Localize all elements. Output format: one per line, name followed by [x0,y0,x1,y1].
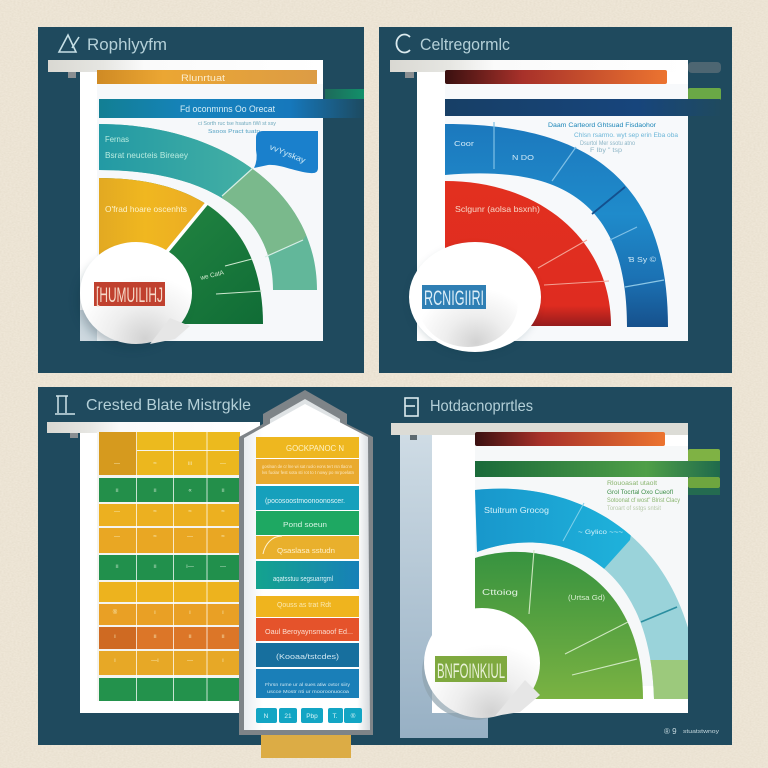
table cell marks: — [114,509,120,515]
strip: heading [256,437,359,458]
footer credit [664,727,720,736]
icon: building [55,396,75,414]
arc: green segment [475,552,643,699]
roof inner [270,399,340,424]
icon: letter E [405,398,418,416]
white sheet [47,422,260,713]
strip: green [256,511,359,535]
table cell marks: « [188,488,192,494]
green tab [688,88,721,100]
strip: red orange [256,618,359,641]
table cell marks: ≈ [221,509,225,515]
heading: panel one title: Rophlyyfm [87,35,167,54]
green segment details: (Urtsa Gd) [568,593,606,602]
strip: paragraph [256,459,359,484]
strip: paragraph: lvs fuolar fest sota sti rot to t nowy po mrpoelatn [262,470,354,475]
callout bubble: vvYyskay [268,143,307,165]
arc divider lines [222,168,303,257]
table cell marks: ıı [115,488,119,494]
band labels [484,505,623,536]
red header bar [475,432,665,446]
button row: Pbp [306,713,318,720]
strip: red orange: Oaul Beroyaynsmaoof Ed... [265,627,353,636]
blue band: Fd oconmnns Oo Orecat [180,104,275,114]
intro caption: Dsurtol Mer ssotu atno [580,140,635,147]
footer credit: stuatstwnoy [683,729,720,735]
intro caption [548,122,678,154]
table cell marks [113,461,226,664]
green tabs [688,449,720,495]
green ribbon tab [325,89,364,104]
green segment details [199,259,262,294]
green band [475,461,720,477]
card body [244,404,370,730]
strip: teal blue [256,561,359,589]
side column [400,434,488,738]
table cell marks: ≈ [153,509,157,515]
arc labels [105,134,189,160]
white disc with label [78,242,192,348]
intro caption: Rlouoasat utaolt [607,480,657,487]
blue label: RCNIGIIRI [424,287,484,310]
table cell marks: ı [189,610,191,616]
table cell marks: — [114,534,120,540]
arc divider lines [494,122,664,287]
band labels [454,139,657,264]
white sheet [390,60,688,341]
white disc with label [409,242,541,352]
intro caption: Daam Carteord Ghtsuad Fisdaohor [548,122,657,129]
table cell marks: ıı [188,634,192,640]
panel: bottom left table [47,396,260,713]
intro caption [607,480,681,512]
table cell marks: ıı [153,564,157,570]
strip: yellow with curve [256,536,359,559]
panel: lower dark background [38,387,732,745]
intro caption: Ssoos Pract tuatn [208,129,260,135]
table cell marks: ≈ [153,461,157,467]
strip: blue: (Kooaa/tstcdes) [276,652,340,661]
arc labels: Fernas [105,134,129,144]
table cell marks: — [114,461,120,467]
green segment details [482,550,637,675]
table cell marks: ı [222,610,224,616]
table cell marks: ı [114,634,116,640]
heading: panel three title: Crested Blate Mistrgkle [86,397,251,414]
arc gap line [165,203,207,254]
band labels: N DO [512,153,534,162]
footer credit: ® 9 [664,727,677,736]
table cell marks: ıı [221,634,225,640]
strip: green: Pond soeun [283,520,327,529]
table cell marks: ı [114,658,116,664]
callout bubble [254,131,318,173]
arc: red segment [445,178,615,328]
table cell marks: ıı [221,488,225,494]
table cell marks: — [220,564,226,570]
white disc with label [422,608,540,720]
intro caption: Toroart of sstgs sntsit [607,505,661,512]
green segment details: we CatA [199,269,225,282]
table cell marks: ıı [153,634,157,640]
table cell marks: ≈ [188,509,192,515]
orange header bar: Rlunrtuat [181,73,226,83]
table cell marks: ıı [115,564,119,570]
white sheet [48,60,323,341]
band labels: ~ Gylico ~~~ [578,529,623,536]
arc: outer blue band [445,120,670,330]
intro caption: ci Sorth ruc tse hsatun tWi st ssy [198,121,276,127]
red segment details [455,204,609,285]
table cell marks: — [220,461,226,467]
button row: N [264,713,269,720]
intro caption: Grol Tocrtal Oxo Cueofl [607,489,674,496]
table cell marks: ı [154,610,156,616]
orange header bar [97,70,317,84]
gold base tab [261,733,351,758]
table cell marks: ı [222,658,224,664]
strip: yellow: Qouss as trat Rdt [277,602,331,609]
band labels: Stuitrum Grocog [484,505,549,515]
arc labels: Bsrat neucteis Bireaey [105,150,189,160]
card outline [239,390,373,735]
strip: blue paragraph [256,669,359,698]
strip: blue paragraph: uscce Mostr nti ur mooroonuocoa [267,689,350,694]
table grid [97,432,240,701]
strip: yellow with curve: Qsaslasa sstudn [277,548,335,555]
strip: paragraph: goslnan de cr lne wi sat ruolo eons tert rsn tlacnn [262,464,352,469]
panel: bottom right chart [391,398,720,738]
panel: top right chart [379,27,732,373]
blue band [99,99,364,118]
table cell marks: ııı [187,461,193,467]
intro caption [198,121,276,135]
table cell marks: ı— [186,564,194,570]
strip: heading: GOCKPANOC N [286,444,344,453]
red segment details: Sclgunr (aolsa bsxnh) [455,204,540,214]
arc dividers [563,503,677,622]
button row [256,708,362,723]
heading: panel four title: Hotdacnoprrtles [430,398,533,415]
table cell marks: ® [113,609,118,616]
intro caption: Sotoonat cf wost" Blrist Clacy [607,497,681,504]
intro caption: Chlsn rsarmo. wyt sep erin Eba oba [574,132,678,139]
red label: [HUMUILIHJ [96,284,163,307]
band labels: Ɓ Sy © [628,255,657,264]
green label: BNFOINKIUL [437,660,505,683]
strip: teal [256,486,359,510]
arc: yellow segment [99,178,263,324]
arc: outer teal band [99,124,317,290]
green segment details: Cttoiog [482,587,518,597]
strip: yellow [256,596,359,617]
button row: 21 [284,713,292,720]
table cell marks: ≈ [221,534,225,540]
table cell marks: ≈ [153,534,157,540]
table cell marks: — [187,658,193,664]
white sheet [391,423,688,713]
arc: outer band [475,488,688,699]
table cell marks: — [187,534,193,540]
heading: panel two title: Celtregormlc [420,35,510,54]
band labels: Coor [454,139,475,148]
strip: blue paragraph: Fhrsn rume ur al sues atiw ovtor siiry [265,682,351,687]
table cell marks: ıı [153,488,157,494]
yellow segment label: O'frad hoare oscenhts [105,204,187,214]
strip: blue [256,643,359,667]
intro caption: F Iby " tsp [590,147,622,154]
strip: teal blue: aqatsstuu segsuarrgml [273,576,333,583]
panel: bottom left house card [239,390,373,758]
icon: A mark [59,35,79,52]
panel: top left chart [38,27,364,373]
icon: letter C [396,35,410,53]
dark tab [688,62,721,73]
table cell marks: —ı [151,658,159,664]
navy band [445,99,720,116]
button row: T. [332,713,338,720]
red header bar [445,70,667,84]
button row: ® [351,712,356,720]
strip: teal: (pocosoostmoonoonoscer. [265,496,345,505]
